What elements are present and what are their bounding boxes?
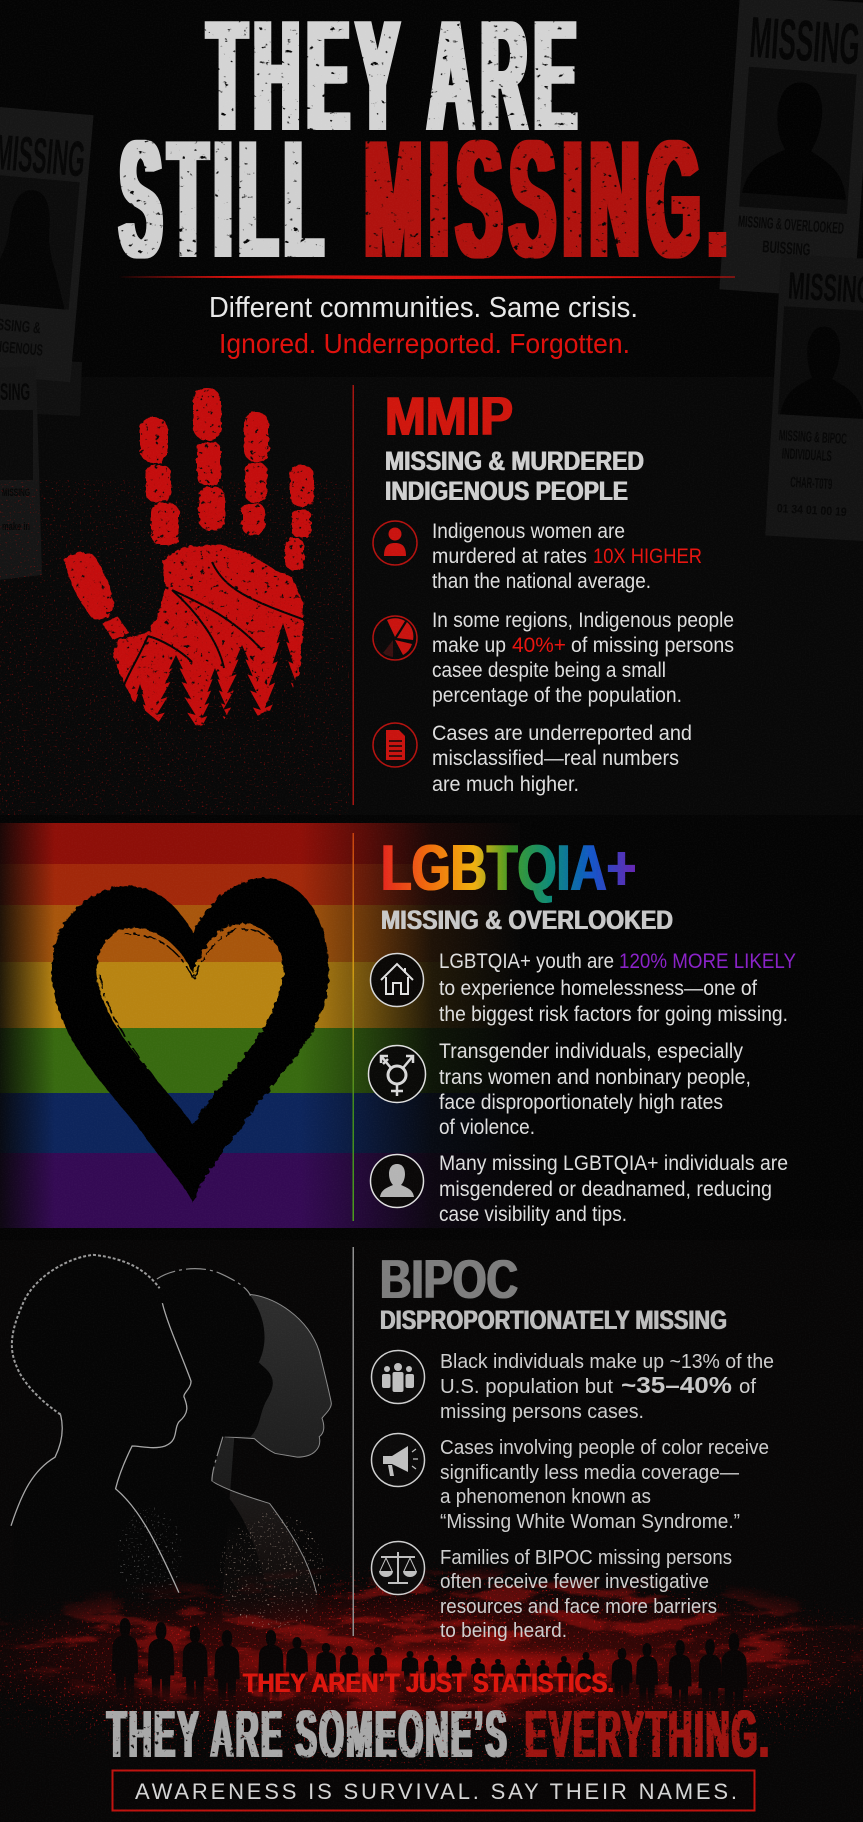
panel: rainbow flag <box>0 823 520 1228</box>
stat text: murder rates: than the national average. <box>432 570 651 593</box>
stat text: share of cases: of missing persons <box>571 634 734 657</box>
stat text: misgendering: Many missing LGBTQIA+ individuals are <box>439 1152 788 1175</box>
missing poster: top right: BUISSING <box>762 237 811 260</box>
stat text: share of cases: make up <box>432 634 506 657</box>
missing poster: lower right <box>765 254 863 541</box>
stat text: violence <box>439 1040 751 1139</box>
middle profile <box>110 1269 275 1626</box>
stat text: media coverage: significantly less media coverage— <box>440 1462 739 1484</box>
subtitle <box>209 292 638 359</box>
stat text: underreporting: Cases are underreported and <box>432 722 692 745</box>
hair outline <box>12 1255 160 1414</box>
closing headline <box>107 1697 771 1772</box>
icon: house <box>370 954 424 1006</box>
title <box>120 0 735 293</box>
stat text: share of cases <box>432 609 734 707</box>
stat text: family barriers: Families of BIPOC missing persons <box>440 1547 732 1569</box>
heart <box>52 878 329 1203</box>
stat text: violence: face disproportionately high rates <box>439 1091 723 1114</box>
icon: pie chart <box>373 616 417 660</box>
section heading: BIPOC: BIPOC <box>380 1248 518 1310</box>
icon: transgender symbol <box>368 1046 426 1102</box>
palm cracks <box>124 562 305 685</box>
stat text: murder rates: murdered at rates <box>432 545 587 568</box>
icon: document <box>373 723 417 767</box>
stat text: homelessness <box>439 950 796 1026</box>
stat text: homelessness: LGBTQIA+ youth are <box>439 950 614 973</box>
section subheading: BIPOC: DISPROPORTIONATELY MISSING <box>380 1305 727 1335</box>
stat text: media coverage: a phenomenon known as <box>440 1486 651 1508</box>
stat text: share of cases: In some regions, Indigenous people <box>432 609 734 632</box>
black trees in palm <box>128 623 305 742</box>
stat text: misgendering: misgendered or deadnamed, reducing <box>439 1178 772 1201</box>
red glow: horizon <box>0 1560 863 1780</box>
rear profile <box>212 1294 331 1626</box>
title: STILL <box>120 105 330 293</box>
divider: LGBTQIA+ <box>352 833 354 1221</box>
stat text: population share: missing persons cases. <box>440 1401 644 1423</box>
stat text: homelessness: to experience homelessness—one of <box>439 977 757 1000</box>
stat text: population share: Black individuals make up ~13% of the <box>440 1351 774 1373</box>
three profile silhouettes <box>11 1255 331 1626</box>
section subheading: MMIP <box>385 446 644 506</box>
missing poster: small bottom left: make in <box>2 521 30 533</box>
stat text: underreporting <box>432 722 692 796</box>
closing line: statistics: THEY AREN’T JUST STATISTICS. <box>243 1668 614 1698</box>
stat text: family barriers: often receive fewer investigative <box>440 1571 709 1593</box>
missing poster: small bottom left <box>0 366 42 580</box>
title underline <box>118 275 735 279</box>
stat text: underreporting: misclassified—real numbers <box>432 747 679 770</box>
hand fill <box>64 388 314 727</box>
stat text: homelessness: the biggest risk factors for going missing. <box>439 1003 788 1026</box>
stat text: media coverage <box>440 1437 769 1533</box>
stat text: murder rates: 10X HIGHER <box>593 545 702 568</box>
stat text: violence: of violence. <box>439 1116 535 1139</box>
missing poster: small behind left <box>34 360 82 416</box>
red splatter around hand <box>0 480 350 815</box>
front profile <box>11 1255 191 1626</box>
stat text: homelessness: 120% MORE LIKELY <box>619 950 796 973</box>
stat text: population share: U.S. population but <box>440 1376 613 1398</box>
subtitle line two: Ignored. Underreported. Forgotten. <box>219 328 630 359</box>
missing poster: small bottom left: SING <box>0 379 30 406</box>
section heading: MMIP: MMIP <box>385 385 513 447</box>
stat text: share of cases: casee despite being a small <box>432 659 666 682</box>
stat text: violence: trans women and nonbinary people, <box>439 1066 751 1089</box>
call to action box <box>112 1770 754 1810</box>
stat text: share of cases: 40%+ <box>512 634 566 657</box>
stat text: murder rates: Indigenous women are <box>432 520 625 543</box>
missing poster: small bottom left: MISSING <box>2 487 30 499</box>
section subheading: LGBTQIA+: MISSING & OVERLOOKED <box>381 905 673 935</box>
stat text: misgendering <box>439 1152 788 1226</box>
divider: MMIP <box>352 385 354 805</box>
panel backdrop: MMIP <box>0 377 863 815</box>
face and shoulder outline <box>11 1303 191 1593</box>
stat text: family barriers: resources and face more barriers <box>440 1596 717 1618</box>
missing poster: lower right: 01 34 01 00 19 <box>776 501 847 519</box>
call to action box: AWARENESS IS SURVIVAL. SAY THEIR NAMES. <box>135 1779 737 1804</box>
stat text: family barriers: to being heard. <box>440 1620 567 1642</box>
stat text: misgendering: case visibility and tips. <box>439 1203 627 1226</box>
stat text: media coverage: “Missing White Woman Syndrome.” <box>440 1511 740 1533</box>
section heading: LGBTQIA+: LGBTQIA+ <box>381 831 636 904</box>
stat text: population share: ~35–40% <box>621 1372 732 1398</box>
stat text: population share <box>440 1351 774 1423</box>
hand print <box>64 388 314 742</box>
dissolving specks on silhouettes <box>118 1505 324 1628</box>
icon: scales of justice <box>372 1542 424 1594</box>
panel backdrop: BIPOC <box>0 1240 863 1822</box>
subtitle line one: Different communities. Same crisis. <box>209 292 638 324</box>
crowd silhouettes <box>112 1618 747 1718</box>
stat text: underreporting: are much higher. <box>432 773 579 796</box>
stat text: media coverage: Cases involving people of color receive <box>440 1437 769 1459</box>
rear profile outline <box>212 1294 331 1593</box>
stat text: family barriers <box>440 1547 732 1642</box>
missing poster: left <box>0 106 94 382</box>
stat text: violence: Transgender individuals, especially <box>439 1040 743 1063</box>
stat text: population share: of <box>739 1376 756 1398</box>
stat text: share of cases: percentage of the population. <box>432 684 682 707</box>
section subheading: MMIP: MISSING & MURDERED <box>385 446 644 476</box>
icon: group of people <box>372 1350 424 1404</box>
section subheading: MMIP: INDIGENOUS PEOPLE <box>385 476 628 506</box>
icon: person silhouette <box>370 1154 424 1208</box>
icon: person <box>373 521 417 565</box>
divider: BIPOC <box>352 1247 354 1636</box>
icon: megaphone <box>372 1434 424 1486</box>
middle profile outline <box>157 1269 250 1481</box>
missing poster: top right <box>719 0 863 299</box>
stat text: murder rates <box>432 520 702 593</box>
